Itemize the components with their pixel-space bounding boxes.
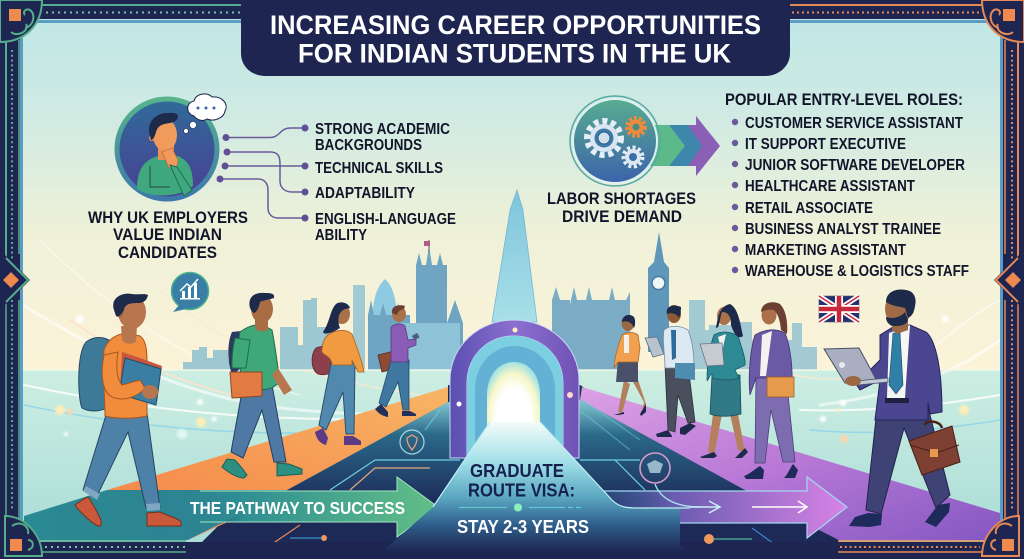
heading: labor shortages: DRIVE DEMAND — [562, 207, 682, 226]
heading: labor shortages: LABOR SHORTAGES — [547, 189, 696, 208]
teal road — [24, 490, 287, 540]
thinking person icon — [117, 94, 226, 199]
background sky — [0, 0, 1024, 372]
shield icon left — [407, 435, 417, 450]
list: entry-level roles: RETAIL ASSOCIATE — [745, 200, 873, 217]
city skyline — [183, 232, 817, 370]
corner ornament top right — [982, 0, 1024, 42]
corner ornament bottom left — [5, 516, 42, 556]
orange gear — [627, 118, 645, 136]
list: entry-level roles: JUNIOR SOFTWARE DEVELOPER — [745, 157, 965, 174]
heading: why uk employers: CANDIDATES — [118, 243, 217, 262]
list: employer values: TECHNICAL SKILLS — [315, 160, 443, 177]
list: entry-level roles: WAREHOUSE & LOGISTICS STAFF — [745, 263, 969, 280]
visa panel: ROUTE VISA: — [468, 480, 575, 500]
visa stay duration: STAY 2-3 YEARS — [457, 517, 589, 537]
list: entry-level roles: MARKETING ASSISTANT — [745, 242, 906, 259]
bottom accent dots — [290, 534, 752, 544]
title text: INCREASING CAREER OPPORTUNITIES — [270, 10, 761, 40]
circuit lines — [250, 400, 795, 559]
purple road — [580, 387, 1000, 540]
graduate 7 in teal suit — [700, 304, 748, 458]
graduate 6 with tablet — [645, 305, 696, 437]
list: employer values: ENGLISH-LANGUAGE — [315, 211, 456, 228]
flowing light waves — [24, 240, 1000, 433]
list: employer values — [315, 121, 456, 244]
corner ornament top left — [0, 0, 42, 42]
parliament — [552, 287, 630, 370]
left castle and tower — [368, 246, 463, 370]
list: entry-level roles — [732, 115, 969, 280]
graduate 9 senior professional — [824, 290, 960, 527]
corner ornament bottom right — [982, 516, 1019, 556]
horizon line — [24, 369, 1000, 371]
student 4 in purple top with phone — [375, 305, 420, 417]
gears icon — [570, 96, 660, 186]
list: employer values: BACKGROUNDS — [315, 137, 422, 154]
visa panel — [370, 422, 700, 559]
heading: why uk employers: WHY UK EMPLOYERS — [88, 208, 248, 227]
list: entry-level roles: IT SUPPORT EXECUTIVE — [745, 136, 906, 153]
graduate 5 in orange jacket — [614, 315, 646, 416]
small gear — [624, 148, 642, 166]
orange road lower sliver — [188, 520, 232, 540]
gherkin tower — [372, 279, 397, 340]
speech bubble with growth chart — [172, 272, 208, 312]
orange road — [107, 387, 448, 490]
background water — [0, 370, 1024, 559]
purple arrow — [600, 477, 847, 538]
side ornament right — [994, 250, 1024, 310]
list: entry-level roles: CUSTOMER SERVICE ASSISTANT — [745, 115, 963, 132]
list: entry-level roles: HEALTHCARE ASSISTANT — [745, 178, 915, 195]
list: employer values: STRONG ACADEMIC — [315, 121, 450, 138]
badge icon right — [647, 460, 663, 473]
the shard — [492, 190, 537, 322]
tunnel glow — [487, 362, 540, 458]
student 3 in orange top — [312, 302, 364, 445]
uk flag — [819, 296, 859, 322]
visa heading: GRADUATE — [470, 461, 564, 481]
thought cloud — [184, 94, 226, 134]
heading: labor shortages — [547, 189, 696, 226]
side ornament left — [0, 250, 30, 310]
tunnel arch — [450, 320, 579, 458]
title banner — [241, 0, 790, 76]
student 2 in green top — [222, 293, 302, 478]
flag on the tower — [424, 240, 430, 252]
big ben — [648, 232, 669, 352]
arrow label: THE PATHWAY TO SUCCESS — [190, 498, 405, 518]
list: employer values: ADAPTABILITY — [315, 185, 415, 202]
connector lines — [216, 124, 308, 222]
large gear — [587, 121, 621, 155]
chevron arrows — [650, 116, 720, 176]
heading: why uk employers: VALUE INDIAN — [113, 225, 222, 244]
visa divider — [459, 504, 584, 512]
glowing particles — [55, 315, 969, 443]
heading: why uk employers — [88, 208, 248, 262]
heading: popular entry-level roles: POPULAR ENTRY-LEVEL ROLES: — [725, 90, 963, 109]
list: entry-level roles: BUSINESS ANALYST TRAINEE — [745, 221, 941, 238]
central ground — [185, 385, 839, 559]
green arrow: the pathway to success — [178, 477, 438, 537]
graduate 8 in purple suit — [744, 302, 798, 479]
student 1 with backpack and books — [75, 294, 181, 526]
title text: FOR INDIAN STUDENTS IN THE UK — [298, 38, 731, 68]
list: employer values: ABILITY — [315, 227, 367, 244]
ground gradient — [287, 400, 745, 500]
